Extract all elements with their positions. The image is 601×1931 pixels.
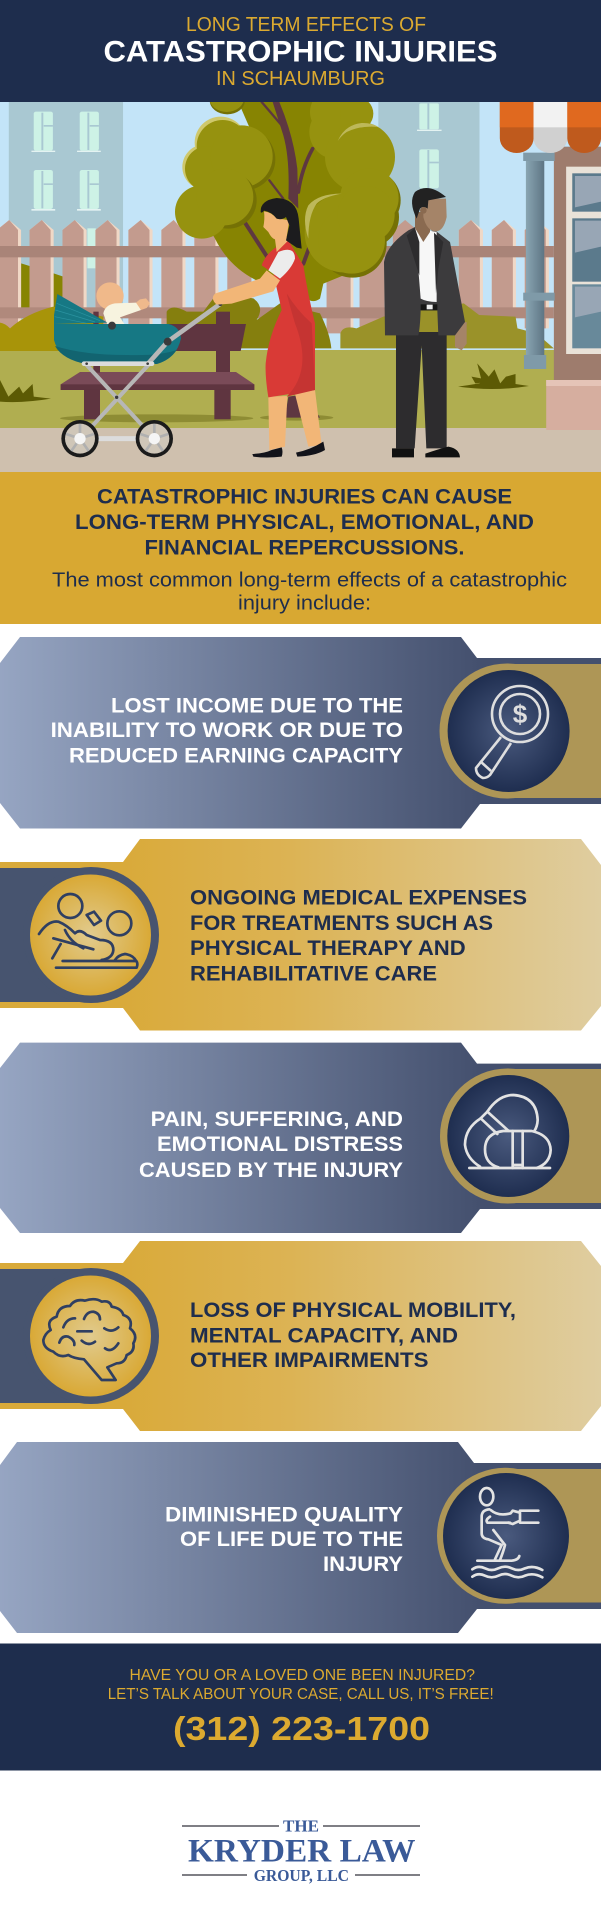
bush behind fence [21,263,62,308]
icon: brain [30,1276,151,1396]
text: lost income [51,693,403,767]
scene foreground [0,84,467,457]
title line: catastrophic injuries: CATASTROPHIC INJURIES [104,36,497,69]
tree [175,84,401,301]
drain pipe [523,153,555,369]
phone number: (312) 223-1700 [173,1710,430,1747]
grass [0,350,554,428]
intro text [52,568,567,614]
left foliage cluster [175,117,275,239]
icon band [0,867,159,1003]
right foliage cluster [305,89,401,278]
call to action text: HAVE YOU OR A LOVED ONE BEEN INJURED? [130,1667,475,1684]
icon: physical therapy [30,874,151,996]
logo: the kryder law group: THE [283,1817,319,1836]
text: lost income: LOST INCOME DUE TO THE [111,693,403,717]
panel: diminished quality of life [0,1442,601,1633]
stroller [54,294,222,457]
lower left items [0,297,333,422]
text: medical expenses: ONGOING MEDICAL EXPENSES [190,886,527,910]
header banner [0,0,601,102]
text: medical expenses: PHYSICAL THERAPY AND [190,936,466,960]
logo: the kryder law group: KRYDER LAW [188,1834,416,1870]
text: quality of life: OF LIFE DUE TO THE [180,1527,403,1551]
text: medical expenses: FOR TREATMENTS SUCH AS [190,911,493,935]
woman [213,198,325,457]
wheel right [136,420,173,457]
man [384,188,467,457]
call to action text: LET’S TALK ABOUT YOUR CASE, CALL US, IT’S FREE! [108,1686,494,1703]
bush behind bench [167,297,331,348]
intro heading: LONG-TERM PHYSICAL, EMOTIONAL, AND [75,509,534,534]
scene background [0,102,601,473]
baby [96,282,150,325]
fence [0,220,554,333]
text: pain and suffering [139,1107,403,1182]
sky [0,102,601,369]
text: loss of mobility: MENTAL CAPACITY, AND [190,1323,458,1347]
bush left [0,307,103,351]
icon band [440,664,601,798]
ground shadows [60,414,253,422]
bush right [340,303,554,348]
sidewalk [0,428,601,473]
text: medical expenses: REHABILITATIVE CARE [190,962,437,986]
text: quality of life: DIMINISHED QUALITY [165,1502,403,1526]
text: pain and suffering: PAIN, SUFFERING, AND [151,1107,403,1131]
icon band [0,1268,159,1404]
text: quality of life [165,1502,403,1576]
wheel left [61,420,99,457]
intro heading: FINANCIAL REPERCUSSIONS. [144,534,465,559]
intro text: The most common long-term effects of a catastrophic [52,568,567,592]
title line: long term effects of: LONG TERM EFFECTS OF [186,14,426,36]
illustration: street scene with woman, stroller and man [0,84,601,473]
text: loss of mobility: LOSS OF PHYSICAL MOBILITY, [190,1298,516,1322]
text: loss of mobility [190,1298,516,1372]
panel: medical expenses [0,839,601,1030]
panel: pain and suffering [0,1043,601,1233]
store [546,147,601,430]
building right [378,102,480,288]
title line: in schaumburg: IN SCHAUMBURG [216,68,385,90]
icon: magnifying glass with dollar [448,670,570,792]
text: lost income: REDUCED EARNING CAPACITY [69,743,403,767]
grass tufts [0,363,529,402]
intro heading: CATASTROPHIC INJURIES CAN CAUSE [97,483,512,508]
tree base [286,396,320,418]
awning [500,102,601,153]
panel: loss of mobility [0,1241,601,1431]
text: quality of life: INJURY [323,1552,403,1576]
intro heading [75,483,534,559]
icon: water skier [443,1473,569,1599]
text: pain and suffering: EMOTIONAL DISTRESS [157,1132,403,1156]
icon: pills [447,1075,569,1197]
logo: the kryder law group: GROUP, LLC [254,1866,349,1885]
bench [61,312,254,419]
text: pain and suffering: CAUSED BY THE INJURY [139,1158,403,1182]
logo: the kryder law group [182,1817,420,1885]
text: loss of mobility: OTHER IMPAIRMENTS [190,1348,428,1372]
text: lost income: INABILITY TO WORK OR DUE TO [51,718,403,742]
text: medical expenses [190,886,527,986]
panel: lost income [0,637,601,828]
call to action text [108,1667,494,1703]
building left [9,102,123,335]
call to action banner [0,1644,601,1770]
intro panel [0,472,601,624]
icon band [437,1468,601,1604]
icon band [440,1068,601,1204]
icon: magnifying glass with dollar: $ [513,699,528,729]
intro text: injury include: [238,592,371,614]
